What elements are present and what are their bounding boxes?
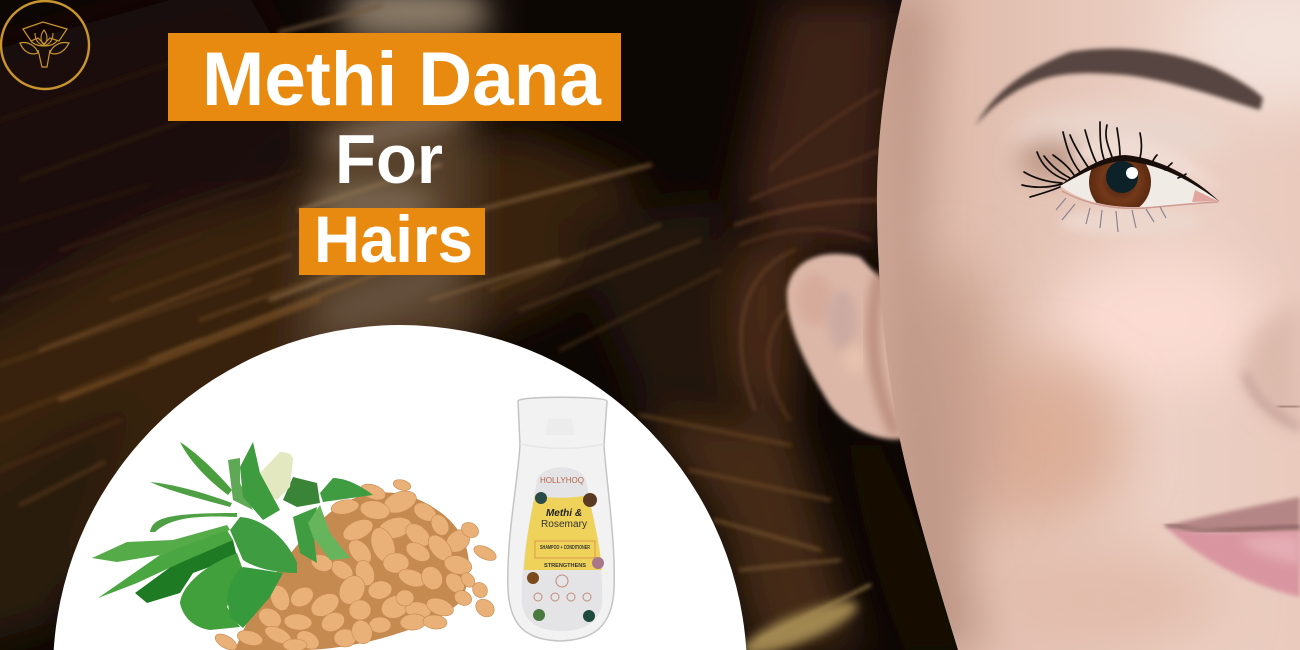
- eye: [1022, 122, 1220, 232]
- eyelashes: [1022, 122, 1186, 197]
- dark hair behind jaw: [850, 445, 958, 650]
- heading highlight: Hairs: Hairs: [314, 202, 473, 276]
- illustration: shampoo bottle: Methi &: [546, 508, 582, 519]
- illustration: fenugreek leaves: [92, 442, 373, 630]
- illustration: shampoo bottle: Rosemary: [541, 519, 587, 530]
- nose: [1244, 300, 1300, 428]
- heading: For: For: [335, 120, 443, 198]
- eyebrow: [975, 49, 1263, 126]
- eyeshadow: [1015, 106, 1201, 149]
- skin: [860, 0, 1300, 650]
- illustration: shampoo bottle: SHAMPOO + CONDITIONER: [540, 545, 590, 551]
- illustration: shampoo bottle: STRENGTHENS: [544, 563, 586, 569]
- illustration: fenugreek seeds pile: [213, 478, 498, 650]
- lips: [1165, 497, 1300, 597]
- label: yellow band: [524, 495, 602, 570]
- face: [787, 0, 1300, 650]
- logo badge: [1, 1, 89, 89]
- illustration: shampoo bottle: HOLLYHOQ: [540, 476, 584, 485]
- heading highlight: Methi Dana: Methi Dana: [202, 37, 602, 122]
- ear: [787, 254, 905, 439]
- illustration: shampoo bottle: [508, 397, 614, 641]
- white circle panel: [54, 325, 746, 650]
- title: [168, 33, 621, 276]
